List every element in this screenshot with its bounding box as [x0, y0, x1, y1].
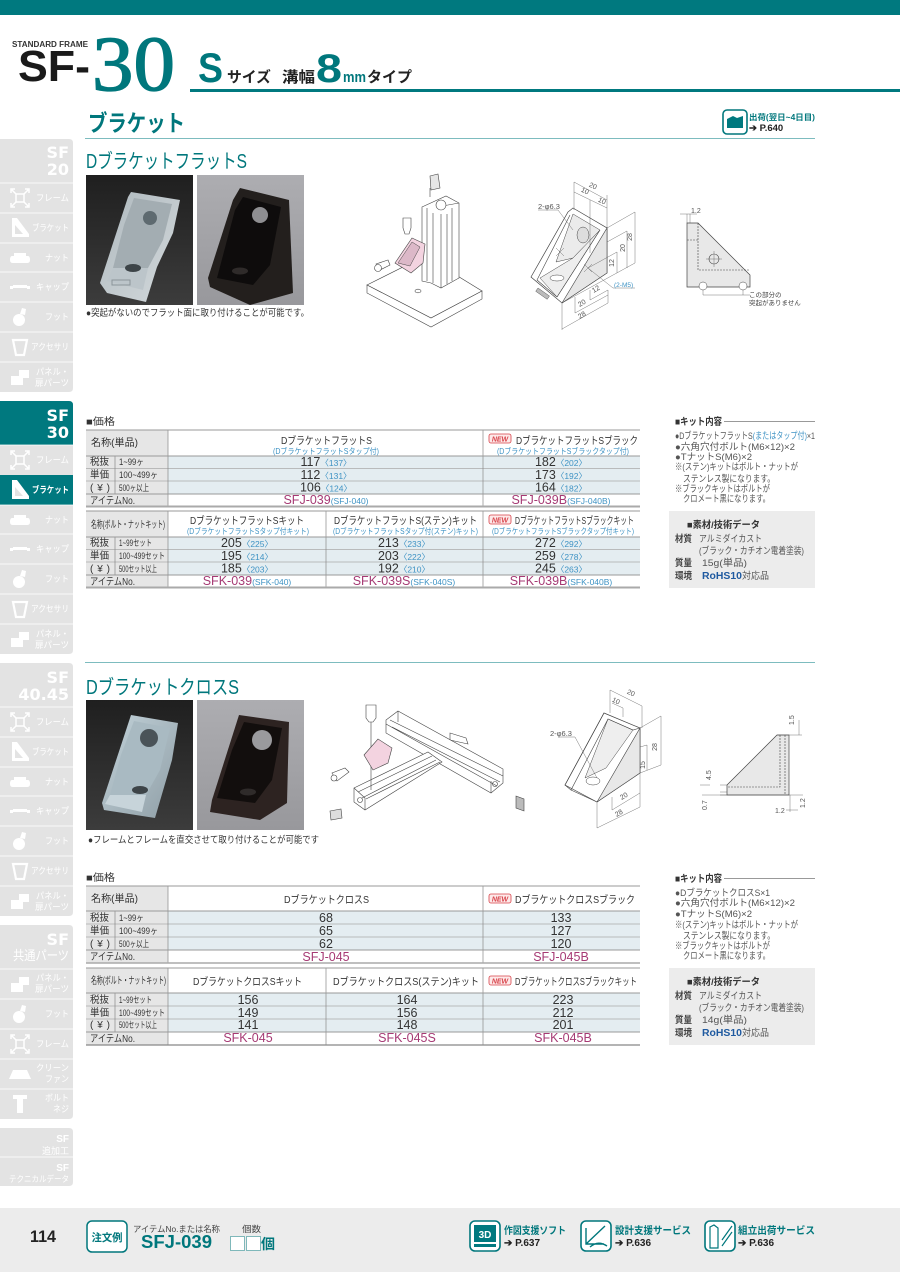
price table: kits, flat S: DブラケットフラットSブラックキット	[515, 514, 634, 527]
service: drawing support software: ➔ P.637	[504, 1238, 540, 1249]
sidebar group: SF 共通パーツ: フット	[45, 1009, 69, 1019]
kit contents, flat S: ●六角穴付ボルト(M6×12)×2	[675, 441, 795, 453]
sidebar group: SF 共通パーツ: パネル・	[36, 973, 69, 983]
price table: kits, flat S: NEW	[492, 518, 510, 524]
price table: single units, flat S: 単価	[90, 468, 109, 481]
price table: kits, flat S: 税抜	[90, 536, 109, 549]
dimension drawing: flat bracket isometric: 10	[580, 187, 590, 197]
price table: single units, flat S: 164〈182〉	[535, 480, 587, 494]
price table: single units, flat S: (DブラケットフラットSタップ付)	[273, 446, 379, 456]
kit contents, cross S: ●六角穴付ボルト(M6×12)×2	[675, 897, 795, 909]
price table: single units, cross S: SFJ-045B	[533, 950, 589, 964]
price heading 1: ■価格	[86, 415, 115, 428]
order example: 個数	[242, 1224, 262, 1234]
kit contents, cross S: ステンレス製になります。	[683, 930, 775, 942]
side view: flat bracket: この部分の	[749, 290, 782, 299]
price table: single units, cross S: (¥)	[90, 939, 110, 950]
service: design support	[581, 1221, 691, 1251]
material and technical data, flat S: (ブラック・カチオン電着塗装)	[699, 545, 804, 557]
price table: kits, flat S: DブラケットフラットSキット	[190, 514, 304, 527]
sidebar group: SF 追加工 / テクニカルデータ: SF	[56, 1134, 69, 1145]
material and technical data, cross S: ■素材/技術データ	[687, 976, 760, 988]
price table: kits, cross S: 税抜	[90, 993, 109, 1006]
price table: kits, cross S: SFK-045S	[378, 1031, 436, 1045]
sidebar group: SF 追加工 / テクニカルデータ: 追加工	[42, 1145, 69, 1156]
price table: single units, flat S: 182〈202〉	[535, 455, 587, 469]
price table: single units, cross S: 名称(単品)	[91, 892, 138, 905]
kit contents, cross S: ●DブラケットクロスS×1	[675, 887, 770, 899]
dimension drawing: flat bracket isometric: 20	[588, 182, 598, 192]
sidebar group: SF 共通パーツ: ファン	[45, 1074, 69, 1084]
price table: kits, flat S: 203〈222〉	[378, 549, 430, 563]
shipping note: 出荷(翌日~4日目)	[749, 112, 815, 122]
material and technical data, cross S: 対応品	[742, 1027, 769, 1039]
price table: kits, flat S: 500セット以上	[119, 564, 157, 574]
side view: flat bracket: 突起がありません	[749, 298, 801, 307]
price table: kits, flat S: 名称(ボルト・ナットキット)	[91, 518, 165, 531]
dimension drawing: cross bracket isometric: 15	[640, 761, 647, 769]
material and technical data, cross S: RoHS10	[702, 1028, 742, 1039]
material and technical data, cross S: アルミダイカスト	[699, 990, 762, 1002]
sidebar group: SF 40.45: ナット	[45, 777, 69, 787]
price table: single units, flat S: SFJ-039(SFJ-040)	[283, 493, 369, 507]
series logo SF-30: 30	[92, 20, 175, 107]
price heading 2: ■価格	[86, 871, 115, 884]
sidebar group: SF 30 (active): パネル・	[36, 629, 69, 639]
photo: black bracket flat	[197, 175, 304, 305]
sidebar group: SF 40.45: ブラケット	[32, 746, 69, 757]
material and technical data, flat S	[669, 511, 815, 588]
dimension drawing: cross bracket isometric: 10	[611, 697, 621, 707]
kit contents, cross S	[675, 872, 815, 962]
sidebar group: SF 追加工 / テクニカルデータ	[0, 1128, 73, 1186]
price table: kits, flat S: (DブラケットフラットSブラックタップ付キット)	[492, 526, 634, 536]
shipping note	[723, 110, 815, 134]
price table: single units, flat S: 名称(単品)	[91, 436, 138, 449]
sidebar group: SF 30 (active): キャップ	[36, 544, 69, 554]
kit contents, cross S: クロメート黒になります。	[683, 951, 770, 962]
price table: kits, flat S: 1~99セット	[119, 538, 152, 548]
sidebar group: SF 20: 扉パーツ	[35, 378, 69, 388]
price table: single units, cross S: 65	[319, 924, 333, 938]
price table: single units, cross S	[86, 886, 640, 964]
kit contents, flat S: ●TナットS(M6)×2	[675, 452, 752, 463]
material and technical data, cross S: 14g(単品)	[702, 1014, 747, 1026]
kit contents, cross S: ●TナットS(M6)×2	[675, 909, 752, 920]
price table: single units, cross S: 500ヶ以上	[119, 939, 149, 949]
price table: kits, cross S: 156	[238, 993, 258, 1007]
price table: kits, cross S: 単価	[90, 1006, 109, 1019]
material and technical data, cross S: 環境	[675, 1027, 692, 1039]
price table: kits, flat S: 259〈278〉	[535, 549, 587, 563]
kit contents, cross S: ※ブラックキットはボルトが	[675, 940, 770, 952]
sidebar group: SF 20: アクセサリ	[31, 342, 69, 352]
price table: kits, flat S: DブラケットフラットS(ステン)キット	[334, 514, 477, 527]
dimension drawing: flat bracket isometric: 2-φ6.3	[538, 202, 560, 211]
dimension drawing: cross bracket isometric	[550, 689, 661, 828]
order example: アイテムNo.または名称	[133, 1224, 220, 1234]
price table: single units, flat S: DブラケットフラットS	[281, 434, 372, 447]
price table: kits, flat S: 213〈233〉	[378, 536, 430, 550]
section divider 2	[85, 662, 815, 663]
price table: single units, cross S: 単価	[90, 924, 109, 937]
kit contents, flat S: ●DブラケットフラットS(またはタップ付)×1	[675, 430, 815, 442]
sidebar group: SF 30 (active): フレーム	[36, 455, 69, 465]
price table: single units, cross S: 100~499ヶ	[119, 926, 158, 936]
sidebar group: SF 40.45: パネル・	[36, 891, 69, 901]
price table: single units, flat S: DブラケットフラットSブラック	[516, 434, 638, 447]
material and technical data, flat S: 環境	[675, 570, 692, 582]
sidebar group: SF 40.45: アクセサリ	[31, 866, 69, 876]
material and technical data, flat S: アルミダイカスト	[699, 533, 762, 545]
product title: Dブラケットフラット S: DブラケットフラットS	[86, 149, 247, 173]
price table: single units, flat S: 税抜	[90, 455, 109, 468]
series logo SF-30: STANDARD FRAME	[12, 40, 89, 49]
price table: single units, cross S: 127	[551, 924, 571, 938]
service: drawing support software: 3D	[479, 1230, 491, 1241]
sidebar group: SF 30 (active)	[0, 401, 73, 654]
dimension drawing: flat bracket isometric: 10	[597, 197, 607, 207]
price table: single units, cross S: アイテムNo.	[90, 951, 135, 963]
price table: kits, cross S: (¥)	[90, 1020, 110, 1031]
price table: kits, cross S	[86, 968, 640, 1045]
price table: single units, cross S: 62	[319, 937, 333, 951]
sidebar group: SF 40.45: キャップ	[36, 806, 69, 816]
material and technical data, flat S: 対応品	[742, 570, 769, 582]
price table: kits, cross S: 500セット以上	[119, 1020, 157, 1030]
order example: 注文例	[92, 1231, 122, 1244]
dimension drawing: flat bracket isometric: 12	[609, 259, 616, 267]
kit contents, flat S: ※(ステン)キットはボルト・ナットが	[675, 461, 798, 473]
price table: single units, flat S	[86, 430, 640, 507]
price table: kits, cross S: 164	[397, 993, 417, 1007]
photo: silver bracket cross	[86, 700, 193, 830]
series subtitle: S size, 8mm slot: サイズ	[227, 68, 271, 86]
dimension drawing: cross bracket isometric: 2-φ6.3	[550, 729, 572, 738]
price table: single units, flat S: 106〈124〉	[300, 480, 352, 494]
sidebar group: SF 40.45: 40.45	[18, 685, 69, 704]
dimension drawing: flat bracket isometric: 20	[577, 299, 587, 309]
price table: single units, cross S: 120	[551, 937, 571, 951]
price table: kits, cross S: DブラケットクロスS(ステン)キット	[333, 975, 479, 988]
service: assembly shipping: ➔ P.636	[738, 1238, 774, 1249]
side view: cross bracket: 1.2	[800, 798, 807, 808]
material and technical data, flat S: RoHS10	[702, 571, 742, 582]
price table: single units, flat S: アイテムNo.	[90, 495, 135, 507]
price table: single units, flat S: 1~99ヶ	[119, 457, 144, 467]
service: drawing support software	[470, 1221, 566, 1251]
sidebar group: SF 共通パーツ: 共通パーツ	[13, 948, 69, 963]
price table: kits, cross S: NEW	[492, 978, 510, 986]
price table: kits, cross S: 1~99セット	[119, 995, 152, 1005]
sidebar group: SF 30 (active): ブラケット	[32, 484, 69, 495]
sidebar group: SF 20: フット	[45, 312, 69, 322]
price table: kits, flat S: 205〈225〉	[221, 536, 273, 550]
price table: kits, flat S: 192〈210〉	[378, 562, 430, 576]
photo caption: ●フレームとフレームを直交させて取り付けることが可能です	[88, 834, 319, 846]
side view: cross bracket: 4.5	[706, 770, 713, 780]
series logo SF-30	[12, 20, 175, 107]
price table: single units, cross S: 133	[551, 911, 571, 925]
series subtitle: S size, 8mm slot: タイプ	[367, 69, 412, 86]
material and technical data, cross S: (ブラック・カチオン電着塗装)	[699, 1002, 804, 1014]
price table: kits, flat S: SFK-039S(SFK-040S)	[353, 574, 455, 588]
dimension drawing: cross bracket isometric: 28	[652, 743, 659, 751]
price table: single units, flat S: 117〈137〉	[300, 455, 352, 469]
price table: kits, flat S: 単価	[90, 549, 109, 562]
side view: cross bracket: 1.2	[775, 808, 785, 815]
sidebar group: SF 追加工 / テクニカルデータ: SF	[56, 1163, 69, 1174]
sidebar group: SF 20: ナット	[45, 253, 69, 263]
side view: flat bracket	[680, 208, 801, 307]
sidebar group: SF 30 (active): フット	[45, 574, 69, 584]
order example: 個	[261, 1236, 275, 1252]
service: assembly shipping: 組立出荷サービス	[738, 1224, 815, 1237]
price table: kits, cross S: DブラケットクロスSキット	[193, 975, 302, 988]
dimension drawing: cross bracket isometric: 28	[614, 809, 624, 819]
kit contents, cross S: ■キット内容	[675, 872, 722, 885]
order example	[87, 1221, 275, 1252]
sidebar group: SF 共通パーツ: SF	[47, 930, 69, 949]
service: assembly shipping	[705, 1221, 815, 1251]
sidebar group: SF 共通パーツ: クリーン	[36, 1063, 69, 1073]
dimension drawing: flat bracket isometric: 12	[591, 285, 601, 295]
sidebar group: SF 20: キャップ	[36, 282, 69, 292]
side view: flat bracket: 1.2	[691, 208, 701, 215]
dimension drawing: flat bracket isometric: 28	[577, 311, 587, 321]
assembly drawing: cross bracket with crossing frames	[330, 705, 524, 820]
price table: kits, cross S: SFK-045	[223, 1031, 273, 1045]
price table: single units, flat S: (¥)	[90, 483, 110, 494]
price table: single units, flat S: NEW	[492, 436, 510, 444]
photo: black bracket cross	[197, 700, 304, 830]
price table: kits, flat S: 245〈263〉	[535, 562, 587, 576]
series subtitle: S size, 8mm slot: 8	[316, 47, 342, 91]
footer band	[0, 1208, 900, 1272]
sidebar group: SF 20: 20	[47, 160, 69, 179]
kit contents, flat S: クロメート黒になります。	[683, 494, 770, 505]
order example: SFJ-039	[141, 1232, 212, 1252]
price table: kits, cross S: 名称(ボルト・ナットキット)	[91, 974, 166, 987]
kit contents, flat S: ■キット内容	[675, 415, 722, 428]
sidebar group: SF 40.45: フット	[45, 836, 69, 846]
sidebar group: SF 40.45: フレーム	[36, 717, 69, 727]
sidebar group: SF 40.45: 扉パーツ	[35, 902, 69, 912]
material and technical data, cross S: 質量	[675, 1014, 692, 1026]
price table: single units, cross S: DブラケットクロスSブラック	[515, 893, 635, 906]
sidebar group: SF 共通パーツ	[0, 925, 73, 1119]
price table: single units, flat S: SFJ-039B(SFJ-040B)	[511, 493, 611, 507]
price table: kits, flat S: 272〈292〉	[535, 536, 587, 550]
sidebar group: SF 30 (active): 扉パーツ	[35, 640, 69, 650]
sidebar group: SF 追加工 / テクニカルデータ: テクニカルデータ	[9, 1174, 69, 1184]
assembly drawing: flat bracket on plate	[367, 174, 482, 327]
side view: cross bracket: 1.5	[789, 715, 796, 725]
sidebar group: SF 20: フレーム	[36, 193, 69, 203]
series subtitle: S size, 8mm slot: 溝幅	[282, 68, 315, 86]
price table: kits, flat S: アイテムNo.	[90, 576, 135, 588]
price table: kits, cross S: 141	[238, 1018, 258, 1032]
price table: kits, flat S: (¥)	[90, 564, 110, 575]
sidebar group: SF 共通パーツ: ボルト	[45, 1093, 69, 1103]
price table: kits, cross S: 201	[553, 1018, 573, 1032]
dimension drawing: cross bracket isometric: 20	[626, 689, 636, 699]
price table: kits, cross S: 149	[238, 1006, 258, 1020]
price table: kits, flat S: (DブラケットフラットSタップ付キット)	[187, 526, 309, 536]
price table: kits, cross S: 156	[397, 1006, 417, 1020]
kit contents, flat S: ステンレス製になります。	[683, 473, 775, 485]
price table: single units, cross S: NEW	[492, 896, 510, 904]
material and technical data, cross S	[669, 968, 815, 1045]
price table: kits, flat S	[86, 511, 640, 588]
sidebar group: SF 30 (active): アクセサリ	[31, 604, 69, 614]
price table: kits, flat S: 195〈214〉	[221, 549, 273, 563]
kit contents, flat S	[675, 415, 815, 505]
material and technical data, flat S: 材質	[675, 533, 692, 545]
product title: Dブラケットクロス S: DブラケットクロスS	[86, 675, 239, 699]
price table: single units, cross S: 68	[319, 911, 333, 925]
page number: 114	[30, 1227, 57, 1246]
service: drawing support software: 作図支援ソフト	[504, 1224, 566, 1237]
material and technical data, flat S: ■素材/技術データ	[687, 519, 760, 531]
sidebar group: SF 共通パーツ: ネジ	[53, 1104, 69, 1114]
price table: kits, flat S: 185〈203〉	[221, 562, 273, 576]
price table: kits, cross S: 212	[553, 1006, 573, 1020]
price table: kits, cross S: SFK-045B	[534, 1031, 592, 1045]
sidebar group: SF 30 (active): ナット	[45, 515, 69, 525]
service: design support: 設計支援サービス	[615, 1224, 691, 1237]
series subtitle: S size, 8mm slot: S	[198, 44, 223, 91]
kit contents, cross S: ※(ステン)キットはボルト・ナットが	[675, 919, 798, 931]
price table: kits, cross S: DブラケットクロスSブラックキット	[515, 975, 637, 988]
side view: cross bracket	[700, 715, 807, 815]
sidebar group: SF 30 (active): SF	[47, 406, 69, 425]
sidebar group: SF 30 (active): 30	[47, 423, 69, 442]
dimension drawing: flat bracket isometric: 28	[627, 233, 634, 241]
price table: kits, cross S: アイテムNo.	[90, 1033, 135, 1045]
sidebar group: SF 20: ブラケット	[32, 222, 69, 233]
price table: single units, flat S: (DブラケットフラットSブラックタップ付)	[497, 446, 629, 456]
material and technical data, flat S: 15g(単品)	[702, 557, 747, 569]
price table: single units, flat S: 112〈131〉	[300, 468, 352, 482]
sidebar group: SF 40.45: SF	[47, 668, 69, 687]
price table: single units, cross S: 税抜	[90, 911, 109, 924]
price table: single units, flat S: 100~499ヶ	[119, 470, 158, 480]
price table: kits, flat S: 100~499セット	[119, 551, 165, 561]
price table: kits, flat S: (DブラケットフラットSタップ付(ステン)キット)	[333, 526, 478, 536]
side view: cross bracket: 0.7	[702, 800, 709, 810]
service: design support: ➔ P.636	[615, 1238, 651, 1249]
price table: single units, flat S: 173〈192〉	[535, 468, 587, 482]
heading: ブラケット: ブラケット	[88, 110, 185, 136]
dimension drawing: cross bracket isometric: 20	[619, 792, 629, 802]
price table: kits, cross S: 223	[553, 993, 573, 1007]
sidebar group: SF 40.45	[0, 663, 73, 916]
price table: single units, flat S: 500ヶ以上	[119, 483, 149, 493]
series subtitle: S size, 8mm slot: mm	[343, 69, 366, 86]
sidebar group: SF 20: SF	[47, 143, 69, 162]
photo caption: ●突起がないのでフラット面に取り付けることが可能です。	[86, 307, 309, 319]
price table: single units, cross S: DブラケットクロスS	[284, 893, 369, 906]
shipping note: ➔ P.640	[749, 123, 783, 134]
material and technical data, cross S: 材質	[675, 990, 692, 1002]
photo: silver bracket flat	[86, 175, 193, 305]
price table: kits, cross S: 100~499セット	[119, 1008, 165, 1018]
dimension drawing: flat bracket isometric	[531, 182, 635, 330]
sidebar group: SF 共通パーツ: 扉パーツ	[35, 984, 69, 994]
price table: single units, cross S: 1~99ヶ	[119, 913, 144, 923]
price table: kits, flat S: SFK-039(SFK-040)	[203, 574, 291, 588]
sidebar group: SF 共通パーツ: フレーム	[36, 1039, 69, 1049]
price table: single units, cross S: SFJ-045	[302, 950, 350, 964]
series subtitle: S size, 8mm slot	[190, 44, 900, 92]
material and technical data, flat S: 質量	[675, 557, 692, 569]
dimension drawing: flat bracket isometric: 20	[620, 244, 627, 252]
kit contents, flat S: ※ブラックキットはボルトが	[675, 483, 770, 495]
sidebar group: SF 20	[0, 139, 73, 392]
price table: kits, flat S: SFK-039B(SFK-040B)	[510, 574, 612, 588]
sidebar group: SF 20: パネル・	[36, 367, 69, 377]
price table: kits, cross S: 148	[397, 1018, 417, 1032]
series logo SF-30: SF-	[18, 42, 90, 91]
dimension drawing: flat bracket isometric: (2-M5)	[614, 282, 633, 289]
top teal bar	[0, 0, 900, 15]
